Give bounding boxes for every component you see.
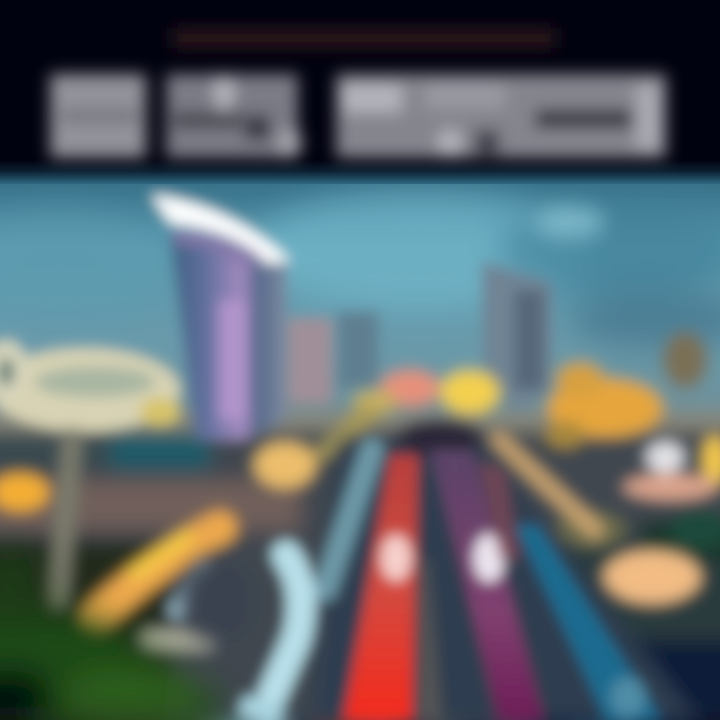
transit line: blue — [515, 525, 662, 720]
right tower — [482, 262, 552, 410]
greenery foreground — [0, 550, 220, 720]
city ground base — [0, 412, 720, 720]
photo scene — [0, 170, 720, 720]
mid buildings — [288, 312, 378, 403]
dark hub — [180, 556, 256, 644]
diagonal glowing streets — [58, 440, 595, 640]
transit line: light blue curve — [178, 450, 372, 720]
title band lower edge fade — [0, 160, 720, 184]
subtitle blurred text strip — [172, 28, 556, 48]
left tower — [150, 194, 292, 440]
transit line: purple — [430, 450, 544, 720]
transit line: grey road strip — [418, 560, 442, 720]
stadium left — [0, 340, 180, 432]
dark centre of junction — [398, 420, 482, 456]
bottom edge colour strip — [0, 680, 720, 720]
title band — [0, 0, 720, 160]
headline blurred letter blocks — [50, 74, 666, 158]
roadway base — [310, 440, 700, 720]
sky background — [0, 170, 720, 470]
warm city lights — [0, 332, 720, 605]
transit line: red — [344, 455, 418, 720]
